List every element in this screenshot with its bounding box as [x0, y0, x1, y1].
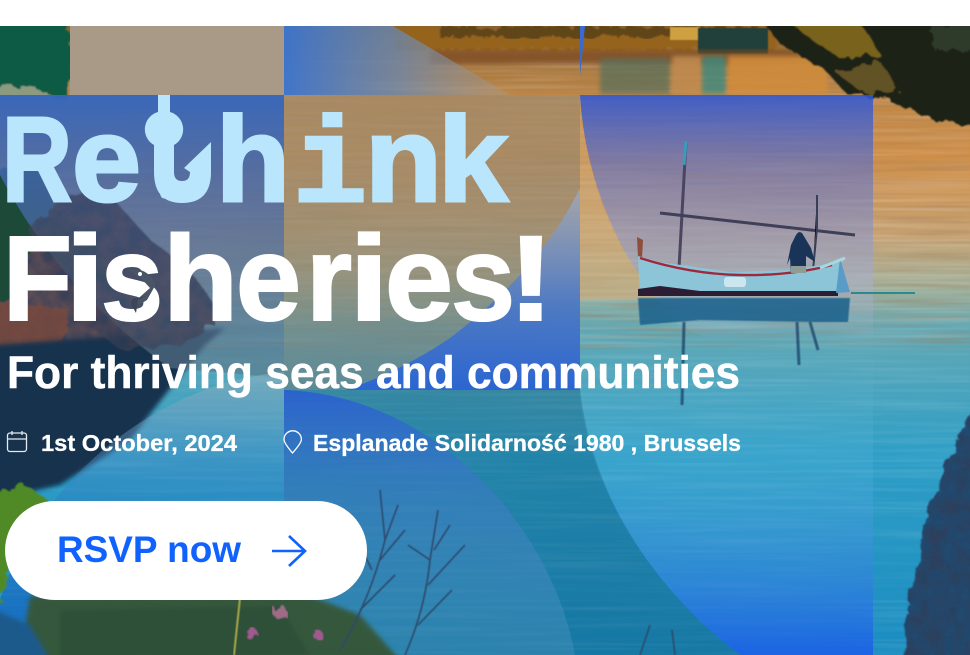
title: Fisheries! — [3, 210, 554, 346]
boat reflection — [638, 298, 850, 405]
title: Rethink: e — [72, 91, 141, 227]
photo: rock seen through the blue fan — [28, 190, 214, 350]
overlay panel: central tan square — [284, 95, 580, 390]
photo: bare plant stems — [340, 490, 675, 655]
overlay panel: top tan square — [70, 26, 284, 95]
title: Fisheries!: i — [65, 210, 105, 346]
overlay panel: teal lower band — [284, 390, 740, 655]
title: Rethink: t — [157, 144, 169, 211]
title: Rethink: k — [438, 91, 509, 227]
photo: grassy foreground with flowers — [0, 592, 400, 655]
photo: rocky headland — [0, 170, 214, 356]
photo: tree at top right — [762, 20, 970, 130]
overlay panel: lower left quarter arc — [0, 372, 284, 655]
photo: far shore and reflections — [395, 26, 830, 94]
title: Rethink: n — [365, 91, 442, 227]
title: Fisheries!: i — [349, 210, 389, 346]
overlay panel: lower quarter circle — [284, 390, 575, 655]
title: Rethink: i — [293, 101, 367, 238]
icon: arrow — [272, 536, 305, 566]
title: Fisheries!: F — [3, 210, 72, 346]
title: Rethink: h — [216, 91, 290, 227]
title: Fisheries!: e — [385, 210, 453, 346]
title: Fisheries!: s — [101, 210, 163, 346]
title: Rethink — [2, 91, 509, 238]
overlay panel: blue fan over the boat — [580, 95, 873, 345]
icon: fish hook replacing the letter t — [145, 95, 211, 203]
title: Fisheries!: r — [306, 210, 352, 346]
overlay panel: left blue fan — [0, 95, 284, 378]
photo: green bush on the left — [0, 485, 48, 600]
icon: map pin — [284, 431, 301, 453]
event date: 1st October, 2024 — [41, 430, 237, 456]
title: Fisheries!: ! — [508, 210, 554, 346]
photo: tree at top left — [0, 16, 74, 100]
title: Rethink: R — [2, 91, 72, 227]
event location: Esplanade Solidarność 1980 , Brussels — [313, 430, 741, 456]
overlay panel: top blue wedge — [284, 26, 510, 95]
photo: dark reflection of the rocks — [0, 328, 225, 500]
photo: fishing boat and fisherman — [637, 141, 915, 405]
overlay panel: tan fan beside the boat — [580, 95, 662, 300]
white band above the banner — [0, 0, 970, 26]
icon: fish cut into the letter s — [128, 269, 156, 313]
title: Fisheries!: s — [451, 210, 515, 346]
overlay panel: small blue sliver — [580, 26, 585, 76]
button: RSVP now — [5, 501, 367, 600]
overlay panel: lower right blue curve — [580, 340, 873, 655]
title: Fisheries!: e — [236, 210, 301, 346]
photo: rock at bottom right — [905, 405, 970, 655]
button: RSVP now: RSVP now — [57, 529, 241, 570]
icon: calendar — [8, 431, 26, 452]
subtitle: For thriving seas and communities — [7, 347, 740, 398]
title: Fisheries!: h — [163, 210, 238, 346]
overlay panel: central blue corner curve — [345, 188, 580, 390]
